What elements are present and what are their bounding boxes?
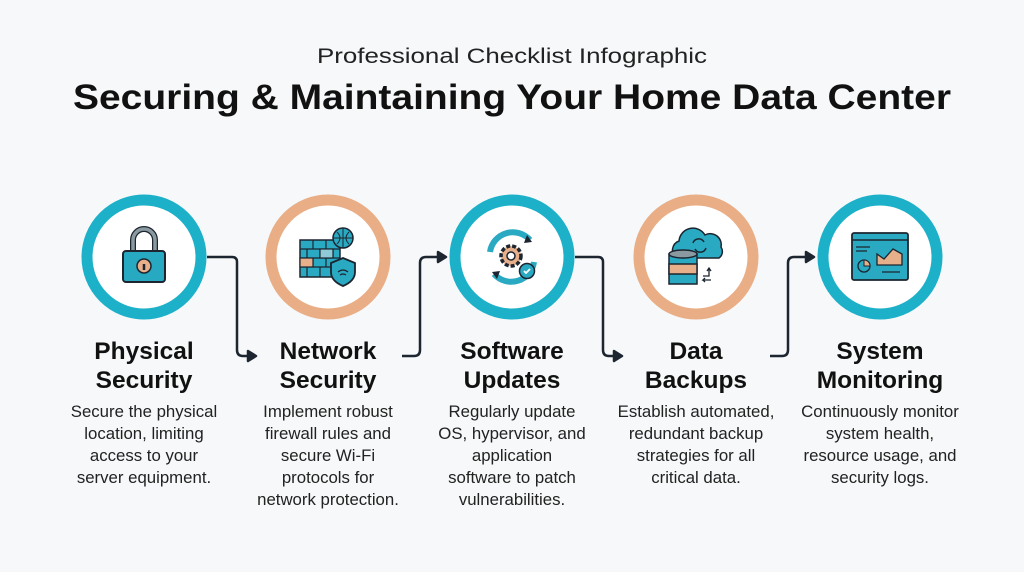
- description: vulnerabilities.: [459, 490, 565, 509]
- description: Continuously monitor: [801, 402, 959, 421]
- description: resource usage, and: [804, 446, 956, 465]
- description: Secure the physical: [71, 402, 217, 421]
- step 4: Data Backups: [618, 200, 774, 487]
- step 5: System Monitoring: [801, 200, 959, 487]
- description: security logs.: [831, 468, 929, 487]
- heading: Physical: [94, 338, 194, 365]
- heading: Network: [280, 338, 377, 365]
- arrow: 2 to 3: [402, 252, 446, 356]
- step 1: Physical Security: Security: [96, 367, 193, 394]
- description: firewall rules and: [265, 424, 391, 443]
- heading: Data: [669, 338, 723, 365]
- step 2: Network Security: Security: [280, 367, 377, 394]
- description: Implement robust: [263, 402, 393, 421]
- description: access to your: [90, 446, 199, 465]
- description: OS, hypervisor, and: [438, 424, 586, 443]
- icon: dashboard window: [823, 200, 937, 314]
- subtitle: Professional Checklist Infographic: [317, 45, 707, 68]
- icon: gear with refresh arrows and check: [455, 200, 569, 314]
- description: system health,: [826, 424, 934, 443]
- arrow: 3 to 4: [575, 257, 622, 361]
- description: protocols for: [282, 468, 375, 487]
- icon: firewall with globe and shield: [271, 200, 385, 314]
- heading: System: [836, 338, 924, 365]
- icon: padlock in teal ring: [87, 200, 201, 314]
- description: critical data.: [651, 468, 741, 487]
- description: redundant backup: [629, 424, 763, 443]
- description: location, limiting: [84, 424, 204, 443]
- title: Securing & Maintaining Your Home Data Center: [73, 78, 951, 117]
- arrow: 1 to 2: [207, 257, 256, 361]
- icon: cloud and database: [639, 200, 753, 314]
- step 4: Data Backups: Backups: [645, 367, 747, 394]
- step 3: Software Updates: [438, 200, 586, 509]
- description: strategies for all: [637, 446, 755, 465]
- description: software to patch: [448, 468, 576, 487]
- step 1: Physical Security: [71, 200, 217, 487]
- description: Establish automated,: [618, 402, 774, 421]
- description: secure Wi-Fi: [281, 446, 375, 465]
- step 2: Network Security: [257, 200, 399, 509]
- heading: Software: [460, 338, 564, 365]
- step 3: Software Updates: Updates: [464, 367, 560, 394]
- description: Regularly update: [449, 402, 575, 421]
- step 5: System Monitoring: Monitoring: [817, 367, 943, 394]
- description: network protection.: [257, 490, 399, 509]
- description: server equipment.: [77, 468, 211, 487]
- description: application: [472, 446, 552, 465]
- arrow: 4 to 5: [770, 252, 814, 356]
